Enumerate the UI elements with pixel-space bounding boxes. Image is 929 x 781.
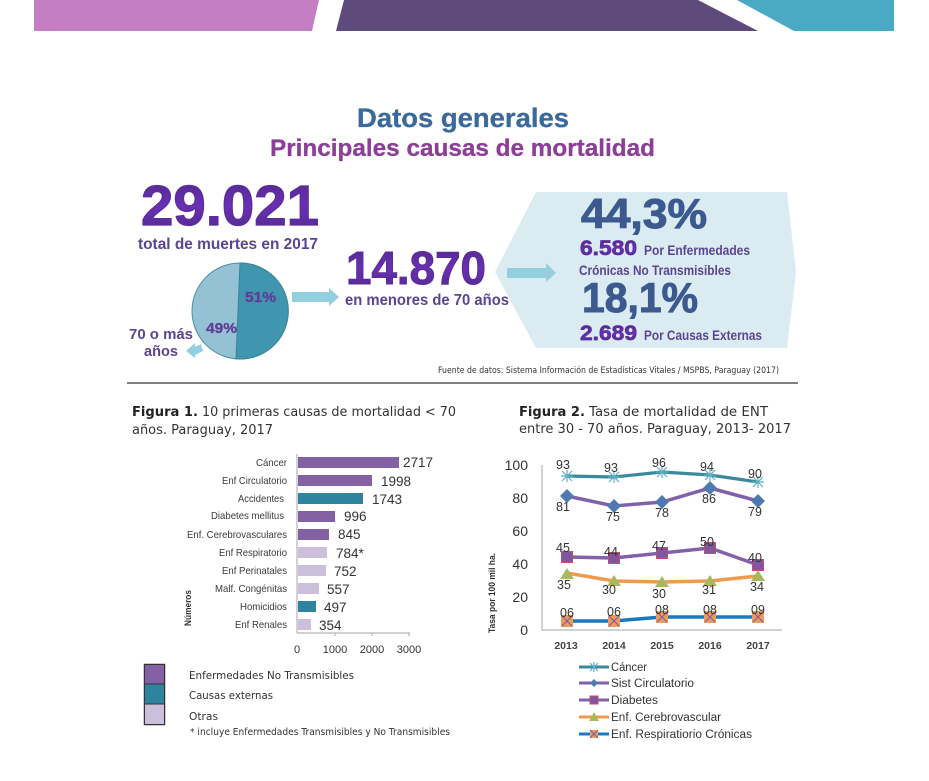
bar x ticks: 0 xyxy=(294,644,300,656)
series: cáncer: 90 xyxy=(748,467,762,481)
line y ticks: 60 xyxy=(512,523,528,539)
bar chart: causes of mortality xyxy=(183,454,433,656)
line y ticks: 100 xyxy=(505,457,528,473)
stat: 2.689 external causes: Por Causas Externas xyxy=(644,328,762,343)
line axes xyxy=(542,465,782,630)
line y ticks xyxy=(505,457,528,638)
series: cáncer: 93 xyxy=(604,461,618,475)
bar x ticks: 1000 xyxy=(323,644,347,656)
stat: 2.689 external causes: 2.689 xyxy=(580,322,637,345)
bar labels: Enf. Cerebrovasculares xyxy=(187,529,287,541)
under 70 stat: en menores de 70 años xyxy=(345,292,509,309)
line y axis title: Tasa por 100 mil ha. xyxy=(487,553,497,633)
series: enf. respiratoria: 09 xyxy=(751,603,765,617)
line x ticks: 2014 xyxy=(602,640,626,652)
title: Principales causas de mortalidad xyxy=(270,135,655,162)
series: enf. cerebrovascular: 30 xyxy=(602,583,616,597)
stat: 44,3%: 44,3% xyxy=(581,190,707,237)
bar labels: Cáncer xyxy=(256,457,287,469)
legend: bar chart xyxy=(144,664,450,738)
series: sist circulatorio: 79 xyxy=(748,505,762,519)
series: cáncer xyxy=(556,456,764,488)
bar labels: Enf Renales xyxy=(235,619,287,631)
stat: 18,1%: 18,1% xyxy=(582,274,698,321)
bar labels: Enf Perinatales xyxy=(222,565,287,577)
legend: line chart xyxy=(579,662,752,741)
bar labels: Enf Circulatorio xyxy=(222,475,287,487)
pie chart xyxy=(192,263,288,359)
series: diabetes: 47 xyxy=(652,539,666,553)
legend: bar chart: Causas externas xyxy=(189,690,273,702)
series: sist circulatorio: 81 xyxy=(556,500,570,514)
bar values xyxy=(319,455,433,633)
stat: 6.580 chronic diseases: Por Enfermedades xyxy=(644,243,750,258)
series: enf. cerebrovascular: 35 xyxy=(557,578,571,592)
figure 2 heading: entre 30 - 70 años. Paraguay, 2013- 2017 xyxy=(519,422,791,437)
legend item: diabetes xyxy=(579,695,658,707)
legend: bar chart: * incluye Enfermedades Transmisibles y No Transmisibles xyxy=(190,727,450,738)
legend: bar chart: Otras xyxy=(189,711,218,723)
legend item: enf. respiratoria: Enf. Respiratiorio Crónicas xyxy=(611,729,752,741)
series: cáncer: 94 xyxy=(700,460,714,474)
source note: Fuente de datos: Sistema Información de Estadísticas Vitales / MSPBS, Paraguay (2017) xyxy=(438,365,779,376)
series: enf. respiratoria: 06 xyxy=(607,605,621,619)
stat: 6.580 chronic diseases: 6.580 xyxy=(580,237,637,260)
series: enf. cerebrovascular: 34 xyxy=(750,580,764,594)
line y ticks: 0 xyxy=(520,622,528,638)
label: 70 o más años xyxy=(129,326,193,360)
legend item: sist circulatorio: Sist Circulatorio xyxy=(611,678,694,690)
series: enf. respiratoria xyxy=(560,603,765,627)
bar values: 752 xyxy=(334,564,357,579)
series: enf. cerebrovascular xyxy=(557,568,765,601)
bar y axis title: Números xyxy=(183,590,193,626)
stat: 6.580 chronic diseases: Crónicas No Transmisibles xyxy=(579,263,731,278)
series: diabetes xyxy=(556,535,764,570)
line x ticks: 2016 xyxy=(698,640,722,652)
series: sist circulatorio: 78 xyxy=(655,506,669,520)
legend item: diabetes: Diabetes xyxy=(611,695,658,707)
figure 2 heading xyxy=(519,405,791,437)
line y ticks: 20 xyxy=(512,589,528,605)
title: Datos generales xyxy=(357,103,569,133)
arrow: to 70 o más años xyxy=(186,343,203,358)
bar values: 845 xyxy=(338,527,361,542)
figure 1 heading: años. Paraguay, 2017 xyxy=(132,423,273,438)
line x ticks: 2017 xyxy=(746,640,770,652)
bar labels: Diabetes mellitus xyxy=(211,510,284,522)
legend item: cáncer xyxy=(579,662,647,674)
stat: 2.689 external causes xyxy=(580,322,762,345)
total deaths stat: total de muertes en 2017 xyxy=(138,236,318,253)
figure 1 heading xyxy=(132,405,456,438)
bar labels: Homicidios xyxy=(240,601,287,613)
bar labels xyxy=(187,457,287,631)
series: sist circulatorio: 75 xyxy=(606,510,620,524)
label: 70 o más años: años xyxy=(144,343,178,360)
bar values: 1743 xyxy=(372,492,402,507)
line y ticks: 80 xyxy=(512,490,528,506)
bar labels: Accidentes xyxy=(238,493,284,505)
figure 2 heading: Figura 2. xyxy=(519,405,585,420)
series: enf. respiratoria: 06 xyxy=(560,606,574,620)
series: enf. cerebrovascular: 30 xyxy=(652,587,666,601)
bar axes xyxy=(297,454,410,636)
bar x ticks xyxy=(294,644,421,656)
figure 1 heading: Figura 1. xyxy=(132,405,198,420)
figure 2 heading: Tasa de mortalidad de ENT xyxy=(588,405,768,420)
bar values: 2717 xyxy=(403,455,433,470)
label: 70 o más años: 70 o más xyxy=(129,326,193,343)
legend: bar chart: Enfermedades No Transmisibles xyxy=(189,670,354,682)
series: diabetes: 50 xyxy=(700,535,714,549)
series: cáncer: 96 xyxy=(652,456,666,470)
bar values: 354 xyxy=(319,618,342,633)
bars xyxy=(298,457,399,630)
line chart: NCD mortality rate xyxy=(487,456,782,652)
bar values: 497 xyxy=(324,600,347,615)
series: sist circulatorio: 86 xyxy=(702,492,716,506)
pie chart: 49% xyxy=(206,320,237,337)
bar x ticks: 2000 xyxy=(360,644,384,656)
bar labels: Enf Respiratorio xyxy=(219,547,287,559)
pie chart: 51% xyxy=(245,289,276,306)
series: diabetes: 44 xyxy=(604,545,618,559)
bar values: 784* xyxy=(336,546,365,561)
under 70 stat: 14.870 xyxy=(346,242,486,294)
figure 1 heading: 10 primeras causas de mortalidad < 70 xyxy=(202,405,456,420)
bar values: 557 xyxy=(327,582,350,597)
under 70 stat xyxy=(345,242,509,309)
arrow: to percentages xyxy=(507,263,556,282)
panel: percentages xyxy=(495,190,796,348)
line x ticks: 2015 xyxy=(650,640,674,652)
line y ticks: 40 xyxy=(512,556,528,572)
series: enf. cerebrovascular: 31 xyxy=(702,583,716,597)
series: sist circulatorio xyxy=(556,481,765,524)
line x ticks: 2013 xyxy=(554,640,578,652)
series: enf. respiratoria: 08 xyxy=(655,603,669,617)
arrow: to menores de 70 años xyxy=(292,288,339,306)
series: enf. respiratoria: 08 xyxy=(703,603,717,617)
line x ticks xyxy=(554,640,770,652)
bar labels: Malf. Congénitas xyxy=(215,583,287,595)
legend item: cáncer: Cáncer xyxy=(611,662,647,674)
series: diabetes: 45 xyxy=(556,541,570,555)
bar values: 996 xyxy=(344,509,367,524)
series: cáncer: 93 xyxy=(556,458,570,472)
title xyxy=(270,103,655,162)
stat: 6.580 chronic diseases xyxy=(579,237,750,278)
bar values: 1998 xyxy=(381,474,411,489)
total deaths stat: 29.021 xyxy=(141,174,319,238)
bar x ticks: 3000 xyxy=(397,644,421,656)
legend item: enf. cerebrovascular: Enf. Cerebrovascular xyxy=(611,712,721,724)
top banner xyxy=(34,0,894,31)
series: diabetes: 40 xyxy=(748,551,762,565)
